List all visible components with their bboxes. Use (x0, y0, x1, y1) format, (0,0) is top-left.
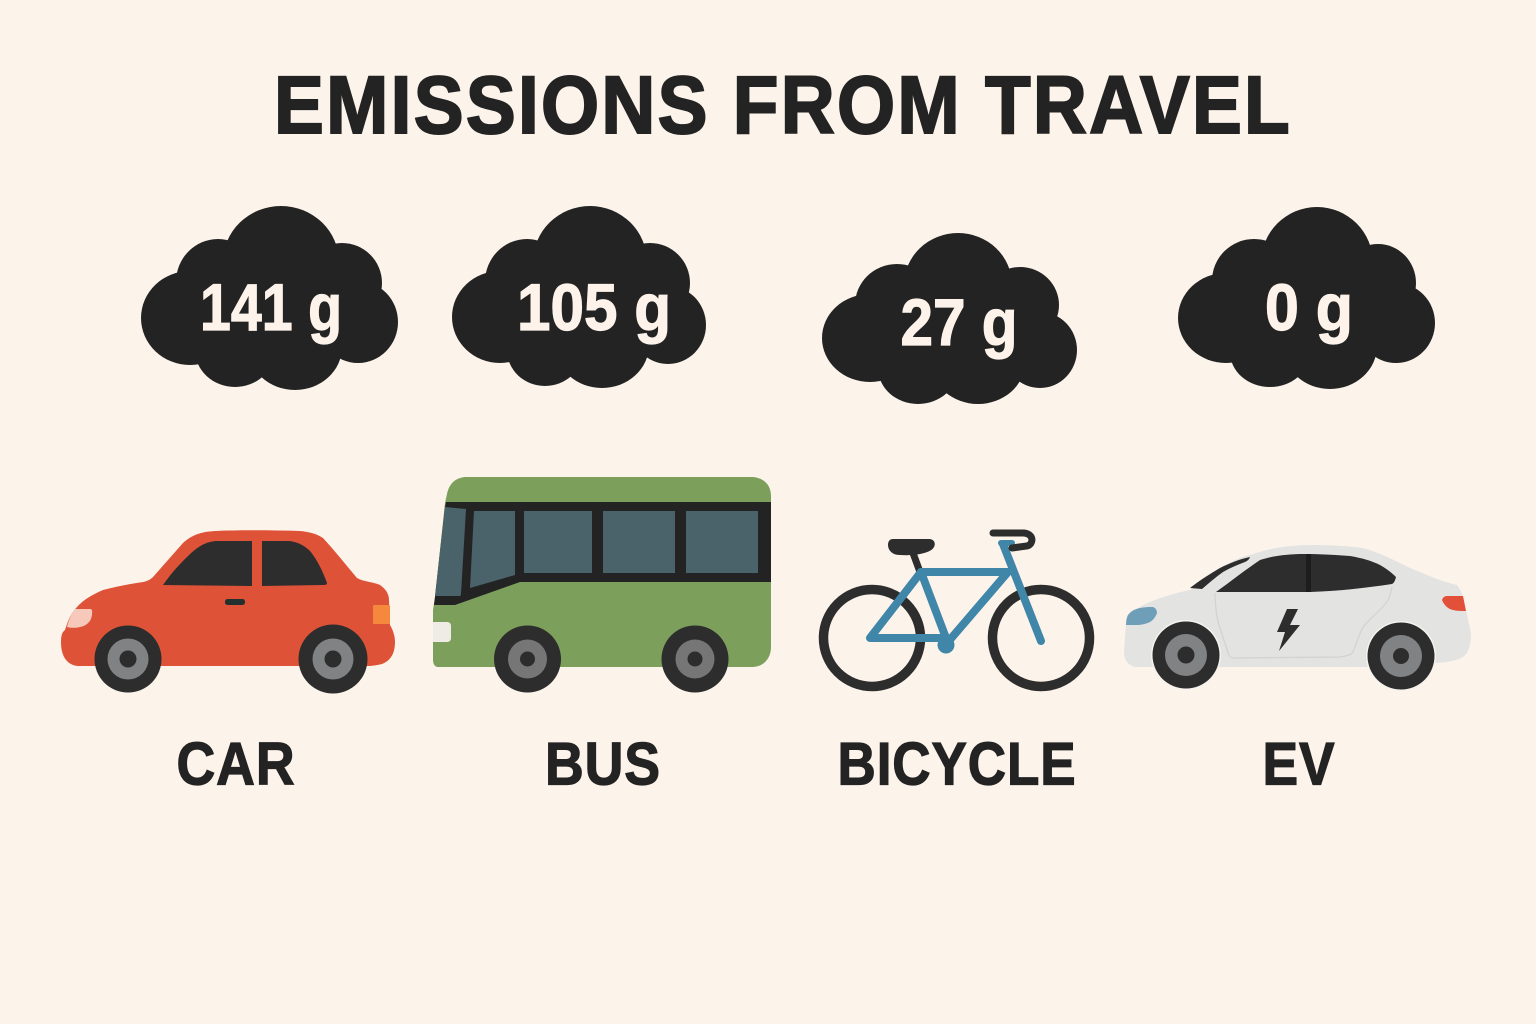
label: EV: EV (1262, 730, 1336, 798)
label: bicycle: BICYCLE (838, 730, 1076, 798)
cloud: car 141 g: 141 g (200, 270, 342, 344)
cloud: bus 105 g: 105 g (517, 270, 671, 344)
icon: electric car (1124, 545, 1471, 691)
icon: car (61, 530, 395, 694)
cloud: bicycle 27 g: 27 g (900, 285, 1018, 359)
icon: bicycle (824, 533, 1090, 686)
cloud: EV 0 g (1178, 207, 1435, 389)
icon: bus (433, 477, 771, 692)
label: car: CAR (176, 730, 296, 798)
title: EMISSIONS FROM TRAVEL (274, 60, 1292, 151)
label: bus: BUS (545, 730, 661, 798)
cloud: bus 105 g (452, 206, 706, 388)
cloud: EV 0 g: 0 g (1265, 270, 1353, 344)
cloud: car 141 g (141, 206, 398, 390)
cloud: bicycle 27 g (822, 233, 1077, 404)
